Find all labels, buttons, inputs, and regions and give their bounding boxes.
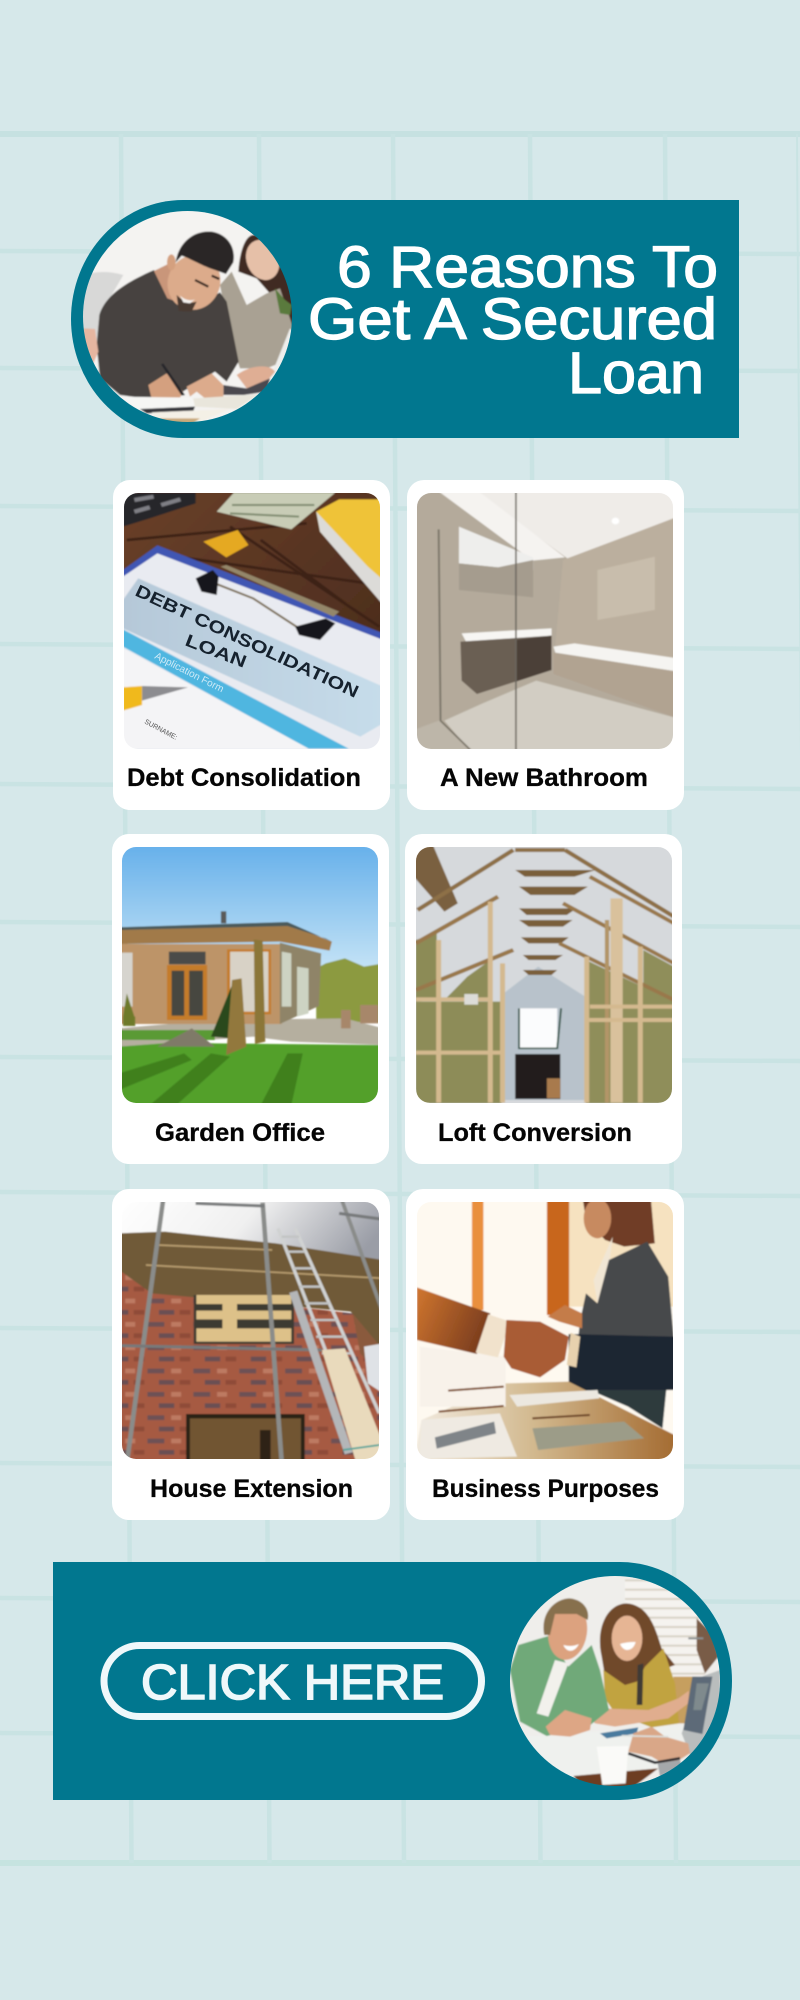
title: Get A Secured (308, 287, 717, 352)
label: Loft Conversion (438, 1119, 632, 1147)
photo: debt consolidation form (123, 490, 383, 750)
label: Garden Office (155, 1119, 325, 1147)
photo: loft conversion (414, 845, 674, 1105)
photo: scaffolding on brick extension (119, 1200, 383, 1464)
label: Business Purposes (432, 1475, 659, 1503)
title: Loan (568, 341, 704, 406)
card: Debt Consolidation (113, 480, 390, 810)
card: A New Bathroom (407, 480, 684, 810)
call-to-action banner (53, 1562, 732, 1800)
title (308, 235, 718, 406)
banner shape (53, 1562, 732, 1800)
photo text: LOAN: LOAN (183, 630, 249, 672)
photo text: application form: Application Form (153, 651, 225, 695)
card: Garden Office (112, 834, 389, 1164)
banner shape (71, 200, 739, 438)
photo: couple signing loan papers (83, 211, 292, 422)
photo text: form heading: DEBT CONSOLIDATION (132, 580, 362, 702)
label: A New Bathroom (440, 764, 648, 792)
card: Loft Conversion (405, 834, 682, 1164)
label: Debt Consolidation (127, 764, 361, 792)
card: House Extension (112, 1189, 390, 1520)
button: click here: CLICK HERE (141, 1655, 444, 1710)
title: 6 Reasons To (337, 235, 718, 300)
photo: bathroom (414, 490, 678, 750)
button: click here (104, 1646, 482, 1716)
photo: garden office (119, 845, 383, 1105)
photo text: surname: SURNAME: (143, 719, 178, 742)
photo: smiling couple with adviser (510, 1576, 720, 1786)
photo: business handshake (414, 1198, 678, 1463)
card: Business Purposes (406, 1189, 684, 1520)
label: House Extension (150, 1475, 353, 1503)
header banner (71, 200, 739, 438)
